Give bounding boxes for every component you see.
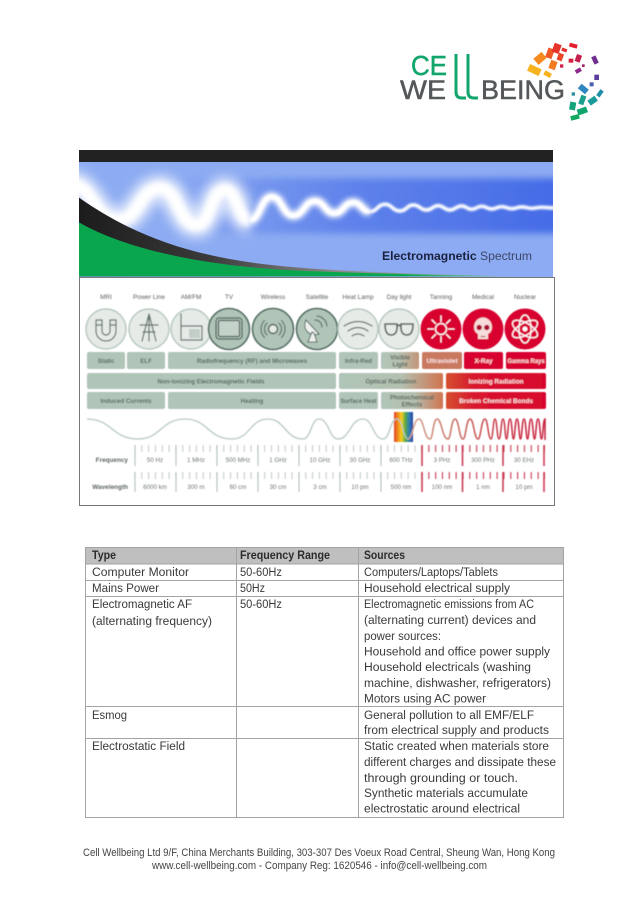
row: electrostatic field: through grounding or touch.: [364, 771, 518, 785]
scale: wavelength: 500 nm: [391, 484, 411, 491]
source labels: MRI: [100, 294, 112, 301]
row: electrostatic field: electrostatic around electrical: [364, 802, 520, 816]
bar row: biological effect: Broken Chemical Bonds: [459, 398, 533, 405]
table: EMF types, frequency ranges and sources: [85, 547, 564, 818]
bar row: field type: [87, 373, 546, 389]
icon: wireless: [252, 308, 294, 350]
scale: frequency: 1 GHz: [269, 457, 287, 464]
row: mains power: [92, 581, 511, 595]
scale: frequency: 50 Hz: [147, 457, 163, 464]
bar row: radiation band: ELF: [140, 358, 152, 365]
bar row: biological effect: Heating: [241, 398, 264, 405]
table header row: Frequency Range: [240, 548, 330, 562]
scale: wavelength: 60 cm: [230, 484, 246, 491]
row: electromagnetic AF: (alternating frequency): [92, 614, 212, 628]
row: electromagnetic AF: Electromagnetic AF: [92, 597, 192, 611]
panel: spectrum chart: [80, 278, 554, 506]
scale: frequency: Frequency: [96, 457, 128, 464]
bar row: field type: Non-Ionizing Electromagnetic Fields: [158, 378, 265, 386]
scale: wavelength: 100 nm: [432, 484, 452, 491]
logo wordmark: WE: [400, 75, 446, 105]
row: esmog: from electrical supply and products: [364, 723, 549, 737]
source labels: Medical: [472, 294, 494, 301]
source labels: [100, 294, 537, 301]
row: computer monitor: Computer Monitor: [92, 565, 189, 579]
source labels: Nuclear: [514, 294, 537, 301]
footer: company details: Cell Wellbeing Ltd 9/F, China Merchants Building, 303-307 Des Voeux Road Central, Sheung Wan, Hong Kong: [83, 847, 555, 859]
source labels: Day light: [387, 294, 412, 301]
scale: wavelength: 6000 km: [143, 484, 167, 491]
icon: skull: [462, 308, 504, 350]
icon: atom: [504, 308, 546, 350]
icon: sun: [420, 308, 462, 350]
row: computer monitor: [92, 565, 498, 579]
logo: Cell Wellbeing: [400, 43, 604, 121]
icon: power line tower: [129, 309, 169, 349]
scale: frequency: 30 GHz: [350, 457, 370, 464]
icon: satellite: [296, 308, 338, 350]
scale: frequency: 500 MHz: [226, 457, 250, 464]
logo wordmark: CE: [411, 50, 447, 81]
row: mains power: Mains Power: [92, 581, 159, 595]
row: electromagnetic AF: power sources:: [364, 629, 441, 643]
footer: company details: www.cell-wellbeing.com - Company Reg: 1620546 - info@cell-wellbeing.com: [151, 860, 487, 872]
wave: non-ionizing frequencies: [87, 419, 408, 439]
scale: frequency: 3 PHz: [434, 457, 450, 464]
banner title: Electromagnetic Spectrum: [382, 249, 532, 263]
bar row: biological effect: Induced Currents: [100, 398, 152, 405]
row: electromagnetic AF: [92, 597, 551, 706]
icon: AM/FM radio: [171, 309, 211, 349]
bar row: radiation band: Radiofrequency (RF) and Microwaves: [197, 358, 308, 365]
bar row: biological effect: Photochemical: [390, 394, 434, 402]
banner: electromagnetic spectrum header: [68, 150, 582, 277]
row: electromagnetic AF: machine, dishwasher, refrigerators): [364, 676, 551, 690]
bar row: biological effect: Surface Heat: [340, 398, 376, 405]
icon: TV: [208, 308, 250, 350]
row: esmog: Esmog: [92, 708, 127, 722]
banner wave graphic: [68, 178, 582, 276]
scale: frequency: 1 MHz: [187, 457, 205, 464]
scale: wavelength: [92, 472, 545, 492]
source labels: AM/FM: [181, 294, 201, 301]
bar row: radiation band: Gamma Rays: [508, 358, 545, 365]
source labels: Heat Lamp: [342, 294, 374, 301]
row: electrostatic field: different charges and dissipate these: [364, 755, 556, 769]
icon: MRI magnet: [86, 309, 126, 349]
row: esmog: General pollution to all EMF/ELF: [364, 708, 534, 722]
row: electrostatic field: Static created when materials store: [364, 739, 549, 753]
bar row: radiation band: Light: [392, 362, 408, 368]
bar row: radiation band: Visible: [390, 354, 410, 362]
scale: frequency: 300 PHz: [471, 457, 495, 464]
row: electromagnetic AF: (alternating current) devices and: [364, 613, 536, 627]
table grid: [85, 547, 564, 818]
row: computer monitor: Computers/Laptops/Tablets: [364, 565, 498, 579]
bar row: radiation band: X-Ray: [474, 358, 493, 365]
bar row: radiation band: Infra-Red: [345, 358, 372, 365]
row: electromagnetic AF: 50-60Hz: [240, 597, 282, 611]
row: computer monitor: 50-60Hz: [240, 565, 282, 579]
bar row: radiation band: Ultraviolet: [426, 358, 458, 365]
scale: frequency: [96, 445, 545, 466]
table header row: [85, 547, 563, 564]
bar row: biological effect: [87, 392, 546, 409]
source labels: Tanning: [430, 294, 453, 301]
icon: glasses: [379, 309, 419, 349]
bar row: radiation band: Static: [98, 358, 115, 365]
scale: frequency: 600 THz: [389, 457, 413, 464]
scale: wavelength: 300 m: [187, 484, 205, 491]
row: electromagnetic AF: Household electricals (washing: [364, 660, 531, 674]
row: electromagnetic AF: Motors using AC power: [364, 692, 486, 706]
banner top dark bar: [79, 150, 553, 162]
scale: frequency: 30 EHz: [514, 457, 534, 464]
logo mosaic mark: [527, 43, 604, 121]
row: mains power: 50Hz: [240, 581, 265, 595]
row: electrostatic field: Synthetic materials accumulate: [364, 786, 528, 800]
row: electrostatic field: [92, 739, 556, 816]
logo wordmark: [400, 50, 565, 105]
scale: wavelength: 10 pm: [515, 484, 533, 491]
visible light rainbow block: [394, 412, 413, 442]
source labels: Wireless: [261, 294, 285, 301]
bar row: field type: Ionizing Radiation: [468, 378, 524, 386]
scale: wavelength: 1 nm: [476, 484, 490, 491]
source labels: TV: [225, 294, 234, 301]
logo wordmark: BEING: [481, 75, 565, 105]
scale: frequency: 10 GHz: [310, 457, 330, 464]
row: electromagnetic AF: Electromagnetic emissions from AC: [364, 597, 534, 611]
row: electrostatic field: Electrostatic Field: [92, 739, 185, 753]
table header row: Type: [92, 548, 116, 562]
row: esmog: [92, 708, 549, 737]
source labels: Power Line: [133, 294, 165, 301]
scale: wavelength: 10 pm: [351, 484, 369, 491]
icon: heat lamp: [338, 309, 378, 349]
bar row: field type: Optical Radiation: [366, 378, 417, 386]
source labels: Satellite: [306, 294, 329, 301]
row: mains power: Household electrical supply: [364, 581, 511, 595]
wave: ionizing frequencies: [408, 419, 545, 440]
footer: company details: [83, 847, 555, 872]
scale: wavelength: Wavelength: [92, 484, 128, 491]
row: electromagnetic AF: Household and office power supply: [364, 644, 551, 658]
scale: wavelength: 3 cm: [313, 484, 327, 491]
category bars: [87, 352, 546, 409]
scale: wavelength: 30 cm: [270, 484, 286, 491]
bar row: radiation band: [87, 352, 546, 369]
table header row: Sources: [364, 548, 405, 562]
bar row: biological effect: Effects: [402, 402, 423, 408]
